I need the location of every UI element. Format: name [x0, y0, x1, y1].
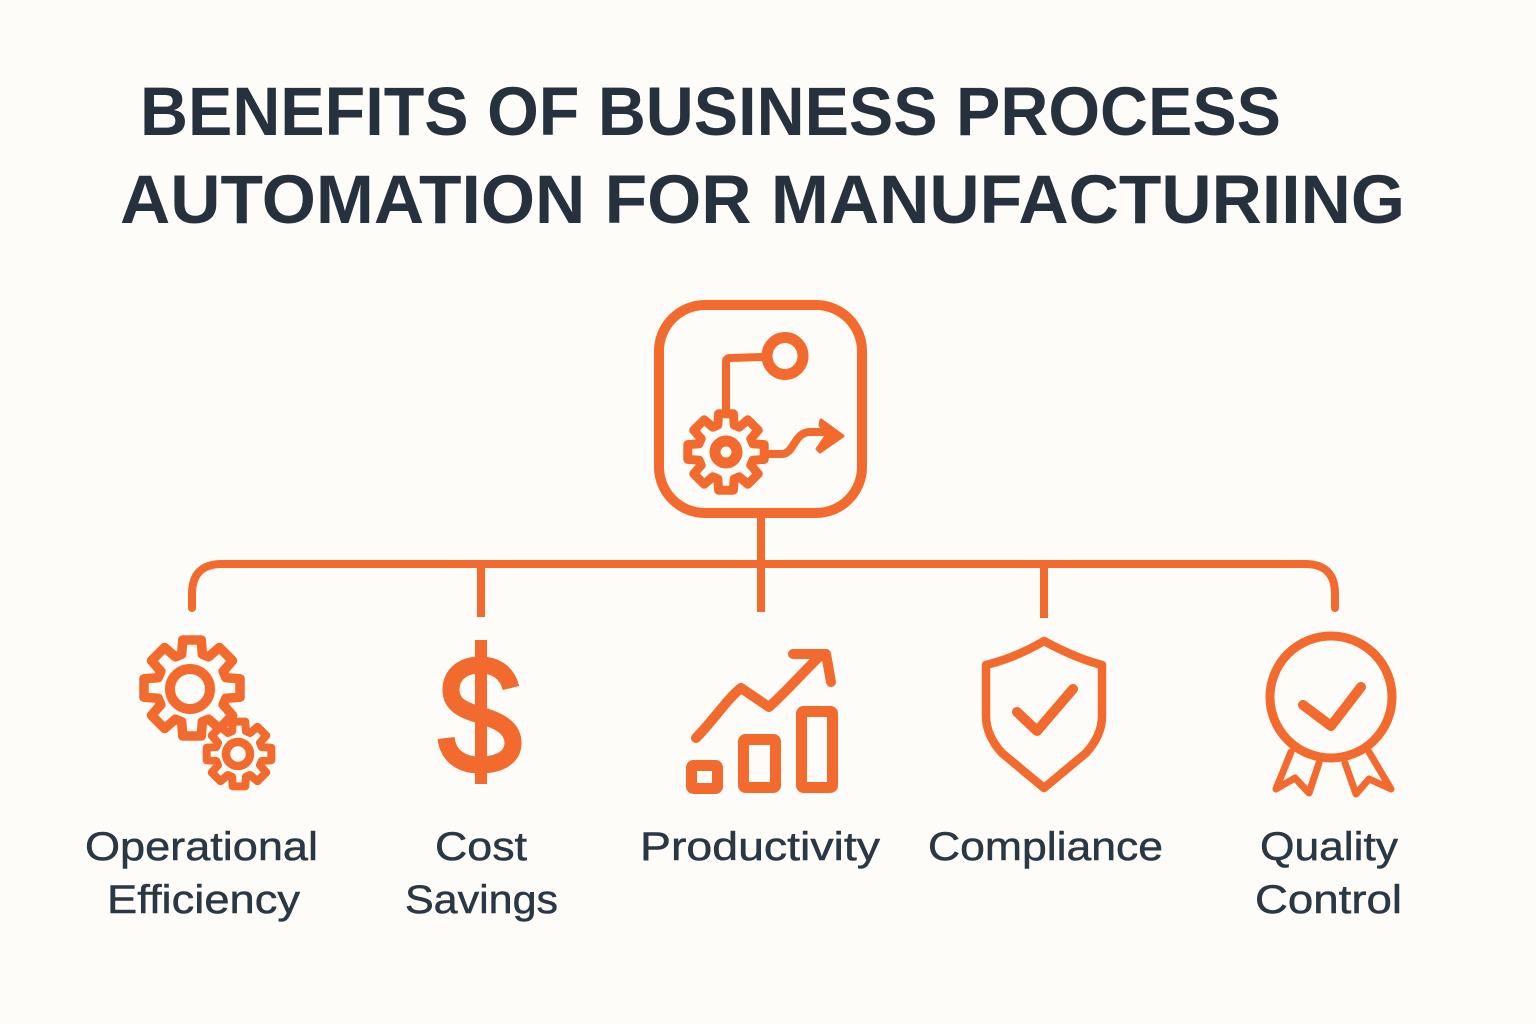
label: operational efficiency: Efficiency: [107, 878, 300, 922]
label: operational efficiency: [85, 825, 318, 922]
icon: dollar sign: [446, 640, 513, 784]
column: cost savings: [405, 640, 558, 922]
label: compliance: Compliance: [928, 825, 1163, 869]
icon: gears: [144, 640, 271, 786]
label: cost savings: Savings: [405, 878, 558, 922]
label: quality control: [1255, 825, 1402, 922]
label: productivity: Productivity: [640, 825, 880, 869]
icon: rising bar chart: [692, 654, 832, 788]
column: productivity: [640, 654, 880, 869]
icon: central gear: [688, 414, 764, 490]
label: quality control: Control: [1255, 878, 1402, 922]
title: AUTOMATION FOR MANUFACTURIING: [120, 161, 1405, 238]
central icon: process automation: [659, 305, 862, 513]
column: compliance: [928, 641, 1163, 869]
rounded icon frame: [659, 305, 862, 513]
icon: shield with check: [986, 641, 1102, 788]
label: cost savings: [405, 825, 558, 922]
label: operational efficiency: Operational: [85, 825, 318, 869]
title: [120, 73, 1405, 238]
label: cost savings: Cost: [435, 825, 527, 869]
column: quality control: [1255, 636, 1402, 922]
icon: award ribbon with check: [1270, 636, 1392, 794]
icon: output arrow: [764, 420, 843, 454]
icon: process node and line: [726, 338, 803, 412]
connector tree: [192, 516, 1335, 618]
label: quality control: Quality: [1260, 825, 1398, 869]
title: BENEFITS OF BUSINESS PROCESS: [140, 73, 1281, 150]
column: operational efficiency: [85, 640, 318, 922]
